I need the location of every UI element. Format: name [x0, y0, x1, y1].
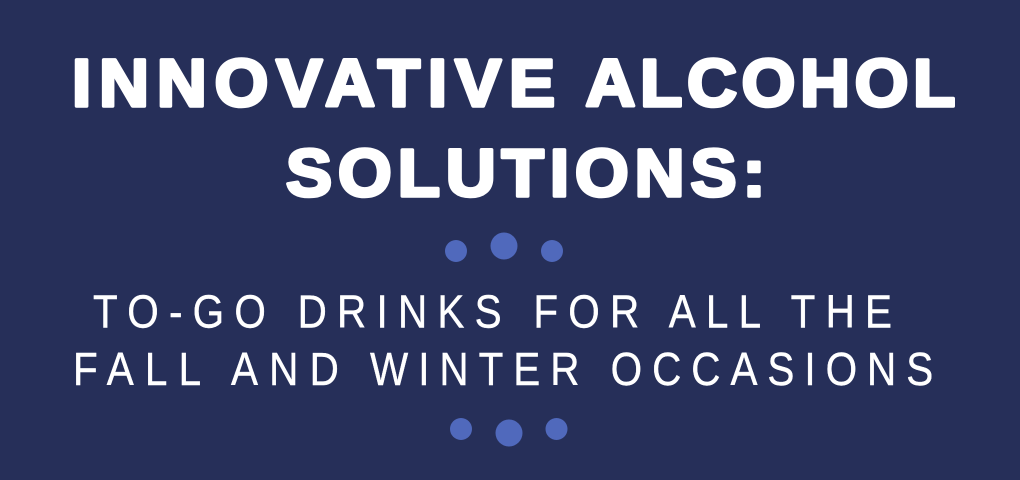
subtitle: WINTER OCCASIONS [370, 345, 933, 396]
subtitle: FALL AND [73, 345, 339, 396]
subtitle: TO-GO DRINKS FOR ALL THE [93, 287, 892, 338]
top dots ornament [445, 232, 563, 262]
title [72, 46, 955, 211]
title: ALCOHOL [586, 46, 955, 121]
title: INNOVATIVE [72, 46, 555, 121]
title: SOLUTIONS: [286, 136, 765, 211]
subtitle [73, 287, 933, 396]
bottom dots ornament [450, 418, 568, 446]
